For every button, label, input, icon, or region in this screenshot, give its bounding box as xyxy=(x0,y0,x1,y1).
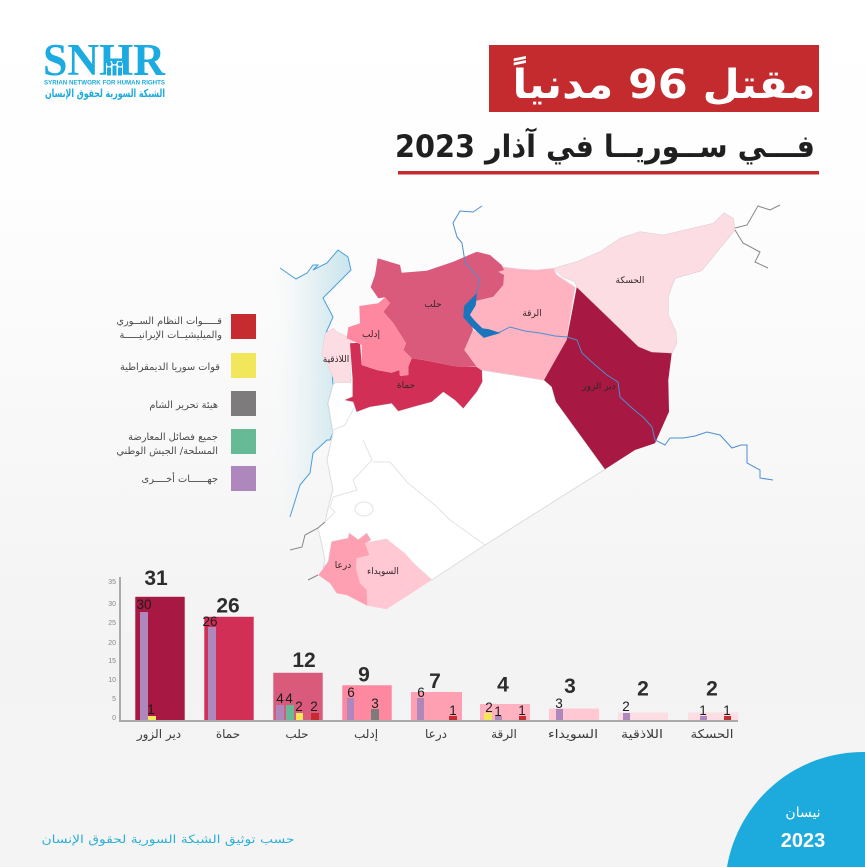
legend: opposition: المسلحة/ الجيش الوطني xyxy=(116,446,218,457)
axis labels: 35 xyxy=(108,579,116,586)
axis labels: 0 xyxy=(112,715,116,722)
province: Raqqa xyxy=(464,267,575,380)
legend: Syrian regime: والميليشيــات الإيرانيـــــة xyxy=(120,330,222,341)
legend: HTS xyxy=(149,391,256,416)
legend: HTS: هيئة تحرير الشام xyxy=(149,400,218,411)
province: Latakia xyxy=(322,328,353,383)
chart axes xyxy=(120,577,738,721)
map labels: الرقة xyxy=(522,309,542,319)
bars: Hama: 26 xyxy=(216,594,240,618)
bars: Aleppo: 4 xyxy=(276,691,284,706)
bars: Latakia xyxy=(618,678,668,741)
date corner xyxy=(727,752,865,867)
date corner: نيسان xyxy=(785,805,821,821)
bars: Daraa: 1 xyxy=(449,703,457,718)
bars: Latakia: 2 xyxy=(622,699,630,714)
bars: Aleppo: حلب xyxy=(285,727,309,741)
sea and coastline xyxy=(270,250,351,520)
bars: Sweida: 3 xyxy=(555,696,563,711)
province: Daraa xyxy=(318,533,371,606)
logo: SNHR: الشبكة السورية لحقوق الإنسان xyxy=(45,87,165,100)
bars: Aleppo: 12 xyxy=(292,649,316,672)
axis labels: 5 xyxy=(112,696,116,703)
logo: SNHR: SYRIAN NETWORK FOR HUMAN RIGHTS xyxy=(44,80,166,86)
province boundaries: Homs, Damascus xyxy=(325,408,485,545)
bars: Hama xyxy=(202,594,254,741)
axis labels: 10 xyxy=(108,677,116,684)
bars: Aleppo xyxy=(273,649,323,741)
map labels: السويداء xyxy=(367,567,399,577)
bars: Raqqa: 2 xyxy=(485,700,493,715)
date corner: 2023 xyxy=(781,830,825,852)
bars: Sweida: السويداء xyxy=(548,727,598,742)
lake Assad xyxy=(464,295,498,337)
bars: Raqqa: الرقة xyxy=(491,727,517,742)
bars: Latakia: 2 xyxy=(637,678,649,700)
legend: opposition: جميع فصائل المعارضة xyxy=(128,432,218,443)
bars: Raqqa: 1 xyxy=(518,703,526,718)
province: Deir ez-Zor xyxy=(544,287,672,469)
map labels: اللاذقية xyxy=(323,355,349,365)
bars: Idlib: 3 xyxy=(371,696,379,711)
bars: Deir ez-Zor xyxy=(135,567,185,742)
bars: Hama: 26 xyxy=(202,614,218,629)
bars: Deir ez-Zor: 1 xyxy=(147,702,155,717)
bars: Sweida xyxy=(548,675,599,742)
bars: Aleppo: 4 xyxy=(285,691,293,706)
bars: Hasakah: 1 xyxy=(699,703,707,718)
bars: Hama: حماة xyxy=(216,727,240,741)
map labels xyxy=(323,276,644,577)
bars: Idlib: 6 xyxy=(347,685,355,700)
bars: Aleppo: 2 xyxy=(310,699,318,714)
province: Idlib xyxy=(347,297,412,376)
map of Syria xyxy=(270,205,780,609)
province: Hasakah xyxy=(553,213,735,353)
bars: Raqqa xyxy=(480,674,530,742)
province: rest of Syria, no data xyxy=(318,370,605,580)
axis labels: 30 xyxy=(108,601,116,608)
bars: Deir ez-Zor: 30 xyxy=(136,597,152,612)
province: Sweida xyxy=(356,539,432,609)
bars: Daraa: 6 xyxy=(417,685,425,700)
map labels: إدلب xyxy=(362,330,380,340)
axis labels xyxy=(108,579,116,722)
legend: opposition xyxy=(116,429,256,457)
subtitle: فـــي ســوريــا في آذار 2023 xyxy=(395,127,815,165)
logo: SNHR: SNHR xyxy=(43,35,165,85)
bars: Hasakah xyxy=(688,678,738,741)
bars: Raqqa: 1 xyxy=(494,704,502,719)
bars: Daraa: 7 xyxy=(429,670,441,693)
legend: Syrian regime: قـــــوات النظام الســوري xyxy=(116,316,222,327)
source note: حسب توثيق الشبكة السورية لحقوق الإنسان xyxy=(42,832,294,847)
bars: Raqqa: 4 xyxy=(497,674,509,696)
bars: Deir ez-Zor: 31 xyxy=(144,567,168,590)
axis labels: 25 xyxy=(108,620,116,627)
map labels: حلب xyxy=(424,300,442,310)
bars: Idlib xyxy=(342,664,392,741)
map labels: الحسكة xyxy=(616,276,644,286)
map labels: دير الزور xyxy=(581,382,616,392)
bar chart xyxy=(108,567,738,742)
title banner: مقتل 96 مدنياً xyxy=(512,55,816,108)
international borders xyxy=(290,205,780,580)
bars: Idlib: 9 xyxy=(358,664,370,686)
bars: Daraa xyxy=(411,670,462,742)
axis labels: 15 xyxy=(108,658,116,665)
legend: Syrian regime xyxy=(116,314,256,341)
province: Hama xyxy=(345,343,482,412)
title banner xyxy=(489,45,819,112)
bars: Latakia: اللاذقية xyxy=(621,727,663,741)
map labels: حماة xyxy=(397,381,415,391)
legend: other xyxy=(142,466,256,491)
bars: Aleppo: 2 xyxy=(295,699,303,714)
bars: Daraa: درعا xyxy=(425,727,447,742)
province: Aleppo xyxy=(371,252,504,367)
legend: other: جهــــــات أخــــرى xyxy=(142,472,218,485)
legend: SDF: قوات سوريا الديمقراطية xyxy=(120,362,220,373)
axis labels: 20 xyxy=(108,640,116,647)
bars: Hasakah: 1 xyxy=(723,703,731,718)
river: Euphrates xyxy=(453,206,773,480)
bars: Idlib: إدلب xyxy=(354,727,378,741)
legend xyxy=(116,314,256,491)
bars: Hasakah: 2 xyxy=(706,678,718,700)
map labels: درعا xyxy=(335,561,351,571)
bars: Hasakah: الحسكة xyxy=(690,727,734,741)
bars: Sweida: 3 xyxy=(564,675,576,698)
bars: Deir ez-Zor: دير الزور xyxy=(136,727,181,742)
legend: SDF xyxy=(120,353,256,378)
subtitle underline xyxy=(398,171,819,174)
